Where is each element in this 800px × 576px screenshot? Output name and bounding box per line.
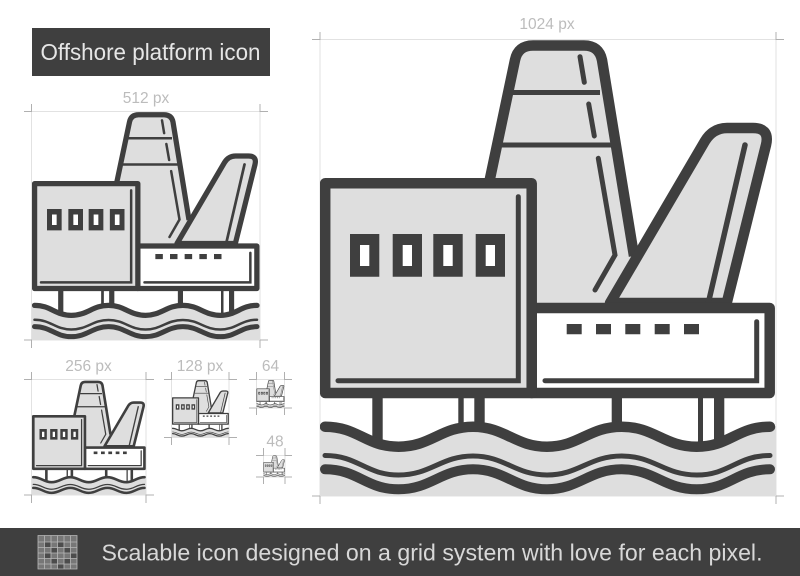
panel: 64 px icon: 64 bbox=[262, 358, 279, 375]
icon: pixel grid bbox=[38, 536, 77, 569]
title: Offshore platform icon bbox=[40, 39, 260, 65]
panel: 512 px icon: 512 px bbox=[123, 90, 170, 107]
panel: 1024 px icon: 1024 px bbox=[519, 16, 575, 33]
panel: 128 px icon: 128 px bbox=[177, 358, 224, 375]
panel: 256 px icon: 256 px bbox=[65, 358, 112, 375]
footer text: Scalable icon designed on a grid system with love for each pixel. bbox=[102, 540, 762, 566]
panel: 48 px icon: 48 bbox=[266, 434, 284, 450]
panel: 128 px icon bbox=[164, 358, 237, 445]
panel: 256 px icon bbox=[24, 358, 154, 503]
footer bar bbox=[0, 528, 800, 576]
panel: 512 px icon bbox=[24, 90, 268, 348]
panel: 48 px icon bbox=[256, 434, 292, 484]
panel: 64 px icon bbox=[249, 358, 292, 415]
title bbox=[32, 28, 270, 76]
